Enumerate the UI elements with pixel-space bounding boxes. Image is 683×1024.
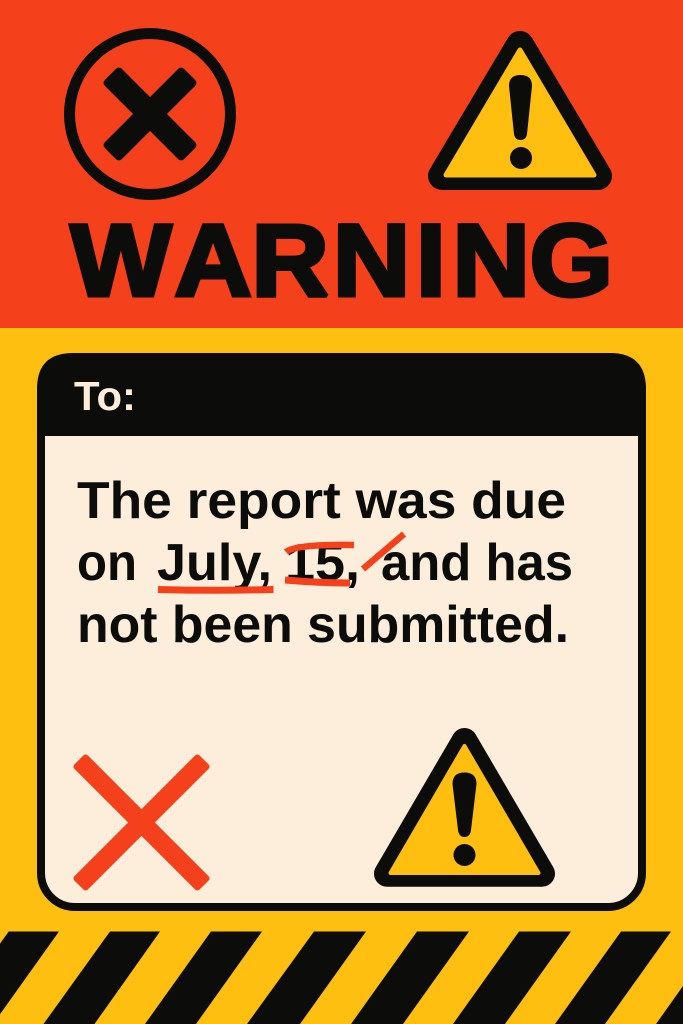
message text: on [77,534,137,592]
panel: red header [0,0,683,328]
message text: not been submitted. [77,596,569,654]
icon: warning triangle [387,741,542,874]
message text: July, [157,534,272,592]
card header bar [37,353,646,436]
label: To: To: [74,373,136,419]
message text: and has [381,534,573,592]
icon: circled X [70,34,230,194]
heading: WARNING: WARNING [70,204,613,318]
hazard stripes [0,932,683,1024]
icon: warning triangle [442,45,598,176]
message text: The report was due [77,472,566,530]
icon: red X [72,753,211,892]
red pen marks [158,534,404,590]
message text [77,472,573,654]
panel: message card [37,353,646,907]
message text: 15, [285,534,360,592]
